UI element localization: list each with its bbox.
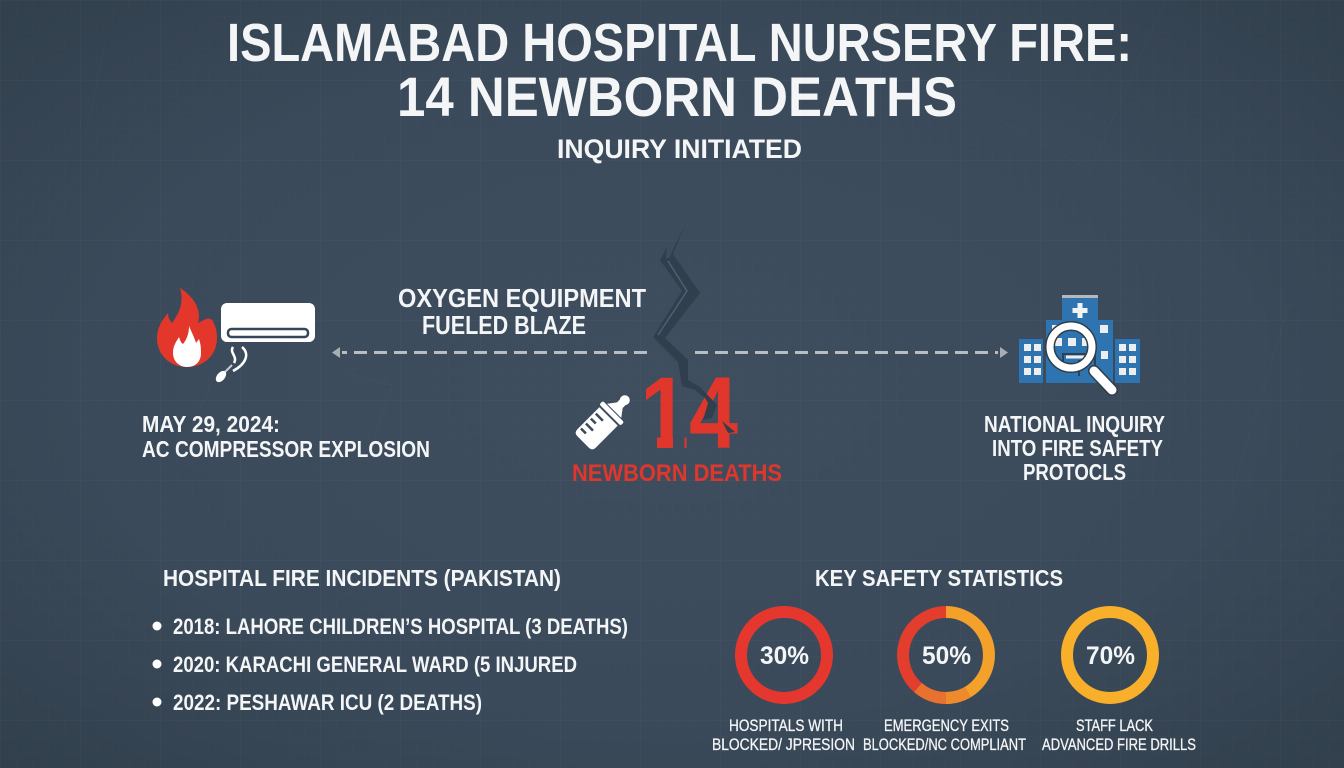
stat: 30 percent: 30% [760,642,809,670]
crack [653,223,735,433]
stat: 50 percent: BLOCKED/NC COMPLIANT [863,736,1026,754]
icon: flame [157,288,217,367]
icon: air conditioner [214,303,315,384]
date text: MAY 29, 2024: [142,411,280,437]
panel: hospital fire incidents [152,565,628,715]
oxygen label: FUELED BLAZE [422,310,586,340]
panel: key safety statistics [712,565,1196,754]
stat: 30 percent [712,612,855,754]
heading: statistics: KEY SAFETY STATISTICS [815,565,1063,591]
death count [573,378,782,481]
icon: baby bottle [572,386,639,453]
stat: 50 percent: EMERGENCY EXITS [884,717,1009,735]
incident list [152,614,628,715]
incident list: 2020: KARACHI GENERAL WARD (5 INJURED [173,652,577,677]
inquiry text: PROTOCLS [1023,459,1126,485]
icon: hospital with magnifier [1019,295,1140,390]
inquiry text: INTO FIRE SAFETY [992,435,1163,461]
timeline arrow: left [332,347,647,358]
timeline arrow: right [695,347,1008,358]
title: 14 NEWBORN DEATHS [397,65,957,128]
oxygen label [398,283,646,340]
oxygen label: OXYGEN EQUIPMENT [398,283,646,313]
title [227,13,1132,128]
incident list: 2018: LAHORE CHILDREN’S HOSPITAL (3 DEATHS) [173,614,628,639]
subtitle: INQUIRY INITIATED [557,134,802,164]
title: ISLAMABAD HOSPITAL NURSERY FIRE: [227,13,1132,73]
stat: 70 percent: 70% [1086,642,1135,670]
heading: incidents: HOSPITAL FIRE INCIDENTS (PAKISTAN) [163,565,561,591]
inquiry text: NATIONAL INQUIRY [984,411,1165,437]
stat: 50 percent [863,612,1026,754]
stat: 50 percent: 50% [922,642,971,670]
inquiry text [984,411,1165,485]
stat: 70 percent: STAFF LACK [1076,717,1153,735]
incident list: 2022: PESHAWAR ICU (2 DEATHS) [173,690,482,715]
stat: 30 percent: BLOCKED/ JPRESION [712,736,855,754]
date text: AC COMPRESSOR EXPLOSION [142,436,430,462]
death count: 14 [640,356,738,470]
newborn deaths label: NEWBORN DEATHS [572,460,782,487]
stat: 70 percent [1042,612,1196,754]
stat: 30 percent: HOSPITALS WITH [729,717,843,735]
stat: 70 percent: ADVANCED FIRE DRILLS [1042,736,1196,754]
date text [142,411,430,462]
